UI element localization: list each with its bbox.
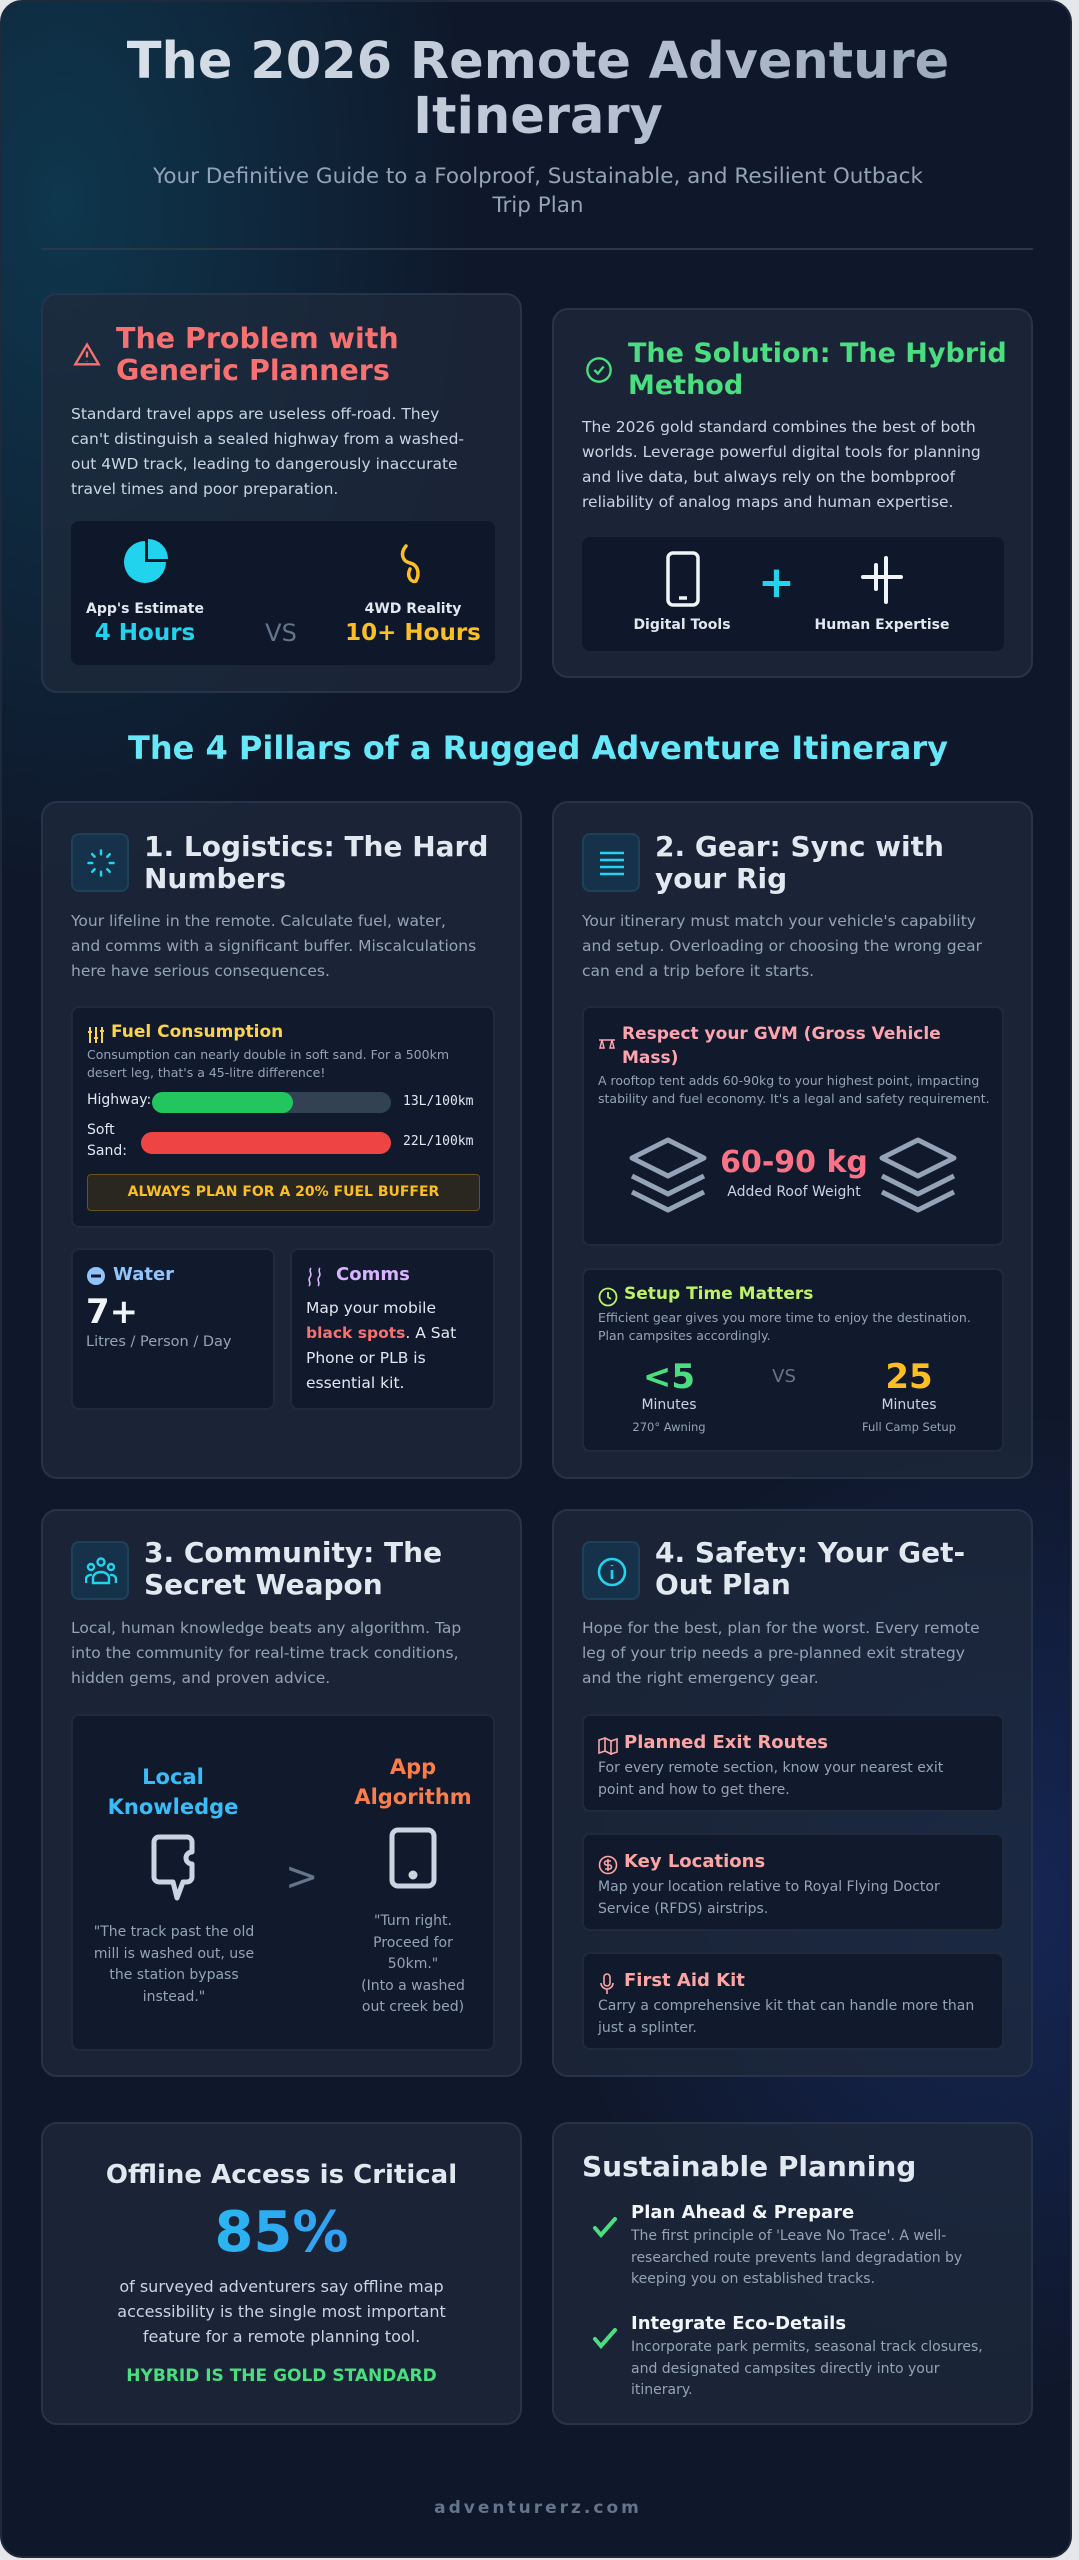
text: solution: worlds. Leverage powerful digital tools for planning [582, 443, 981, 461]
stat: 85% [43, 2200, 520, 2266]
comparison: app vs reality [71, 521, 495, 665]
water box: Litres / Person / Day [86, 1334, 231, 1350]
text: logistics: here have serious consequences. [71, 962, 330, 980]
title [2, 34, 1074, 144]
text: solution: reliability of analog maps and human expertise. [582, 493, 954, 511]
text: safety: leg of your trip needs a pre-planned exit strategy [582, 1644, 965, 1662]
stat: full camp: 25 [885, 1357, 933, 1397]
fuel consumption box: desert leg, that's a 45-litre difference! [87, 1065, 325, 1080]
item: first aid: just a splinter. [598, 2020, 697, 2036]
stat: awning: <5 [643, 1357, 695, 1397]
heading: logistics [144, 830, 488, 895]
text: problem: travel times and poor preparation. [71, 480, 338, 498]
heading: community [144, 1536, 442, 1601]
footer: adventurerz.com [434, 2498, 642, 2518]
text: logistics: Your lifeline in the remote. Calculate fuel, water, [71, 912, 446, 930]
water box: Water [113, 1264, 174, 1285]
subtitle [153, 164, 923, 218]
item: exit routes: For every remote section, know your nearest exit [598, 1760, 943, 1776]
GVM box: Mass) [622, 1048, 678, 1068]
comms box: Comms [336, 1264, 410, 1285]
text: offline: of surveyed adventurers say offline map [119, 2277, 444, 2296]
heading: app algorithm [354, 1755, 472, 1809]
icon: chat [152, 1834, 194, 1900]
item: eco details: itinerary. [631, 2382, 693, 2398]
GVM box: stability and fuel economy. It's a legal and safety requirement. [598, 1091, 990, 1106]
text: gear: can end a trip before it starts. [582, 962, 814, 980]
fuel consumption box: Consumption can nearly double in soft sand. For a 500km [87, 1047, 449, 1062]
heading: problem: The Problem with [116, 322, 399, 355]
item: plan ahead: Plan Ahead & Prepare [631, 2202, 854, 2223]
item: key locations: Map your location relative to Royal Flying Doctor [598, 1879, 940, 1895]
hybrid diagram: Human Expertise [815, 617, 949, 633]
icon: tablet [390, 1828, 436, 1888]
text: problem: can't distinguish a sealed highway from a washed- [71, 430, 464, 448]
icon: layers left [630, 1138, 706, 1212]
bar: soft sand [87, 1122, 127, 1159]
item: eco details: Integrate Eco-Details [631, 2313, 846, 2334]
setup time box [582, 1268, 1004, 1452]
comparison: local vs app: Proceed for [373, 1934, 453, 1950]
setup time box: Plan campsites accordingly. [598, 1328, 771, 1343]
heading: app algorithm: App [390, 1755, 436, 1779]
GVM box: 60-90 kg [720, 1145, 868, 1180]
comparison: local vs app: "The track past the old mill is washed out, use the station bypass instead." [94, 1924, 254, 2004]
comparison: app vs reality: 4WD Reality [365, 601, 461, 617]
comparison: local vs app: (Into a washed [361, 1978, 465, 1994]
comparison: app vs reality: VS [265, 619, 297, 647]
comparison: local vs app [71, 1714, 495, 2051]
setup time box: Efficient gear gives you more time to enjoy the destination. [598, 1310, 971, 1325]
heading: safety: Out Plan [655, 1568, 791, 1601]
item: plan ahead: researched route prevents land degradation by [631, 2250, 962, 2266]
panel: gear [552, 801, 1033, 1479]
text: safety: Hope for the best, plan for the worst. Every remote [582, 1619, 980, 1637]
icon: community [71, 1541, 129, 1600]
text: community: Local, human knowledge beats any algorithm. Tap [71, 1619, 461, 1637]
heading: 4 pillars: The 4 Pillars of a Rugged Adventure Itinerary [128, 729, 948, 767]
comparison: local vs app: 50km." [388, 1956, 438, 1972]
hybrid diagram: Digital Tools [633, 617, 731, 633]
heading: logistics: 1. Logistics: The Hard [144, 830, 488, 863]
heading: problem [116, 322, 399, 387]
title: The 2026 Remote Adventure [127, 32, 949, 91]
text: community: into the community for real-time track conditions, [71, 1644, 459, 1662]
text: community [71, 1619, 461, 1687]
text: gear [582, 912, 982, 980]
text: safety [582, 1619, 980, 1687]
comparison: app vs reality: 10+ Hours [345, 620, 481, 646]
arrow: greater than: > [285, 1854, 319, 1900]
text: logistics [71, 912, 476, 980]
stat: 85%: 85% [214, 2200, 349, 2265]
icon: foot [400, 544, 420, 584]
icon: layers right [880, 1138, 956, 1212]
hybrid diagram [582, 537, 1004, 651]
item: key locations [582, 1833, 1004, 1931]
icon: gear list [582, 833, 640, 892]
text: problem: Standard travel apps are useless off-road. They [71, 405, 439, 423]
heading: app algorithm: Algorithm [354, 1785, 472, 1809]
heading: solution: The Solution: The Hybrid [628, 338, 1007, 369]
panel: problem [41, 293, 522, 693]
callout: fuel buffer: ALWAYS PLAN FOR A 20% FUEL BUFFER [128, 1184, 439, 1200]
icon: warning [73, 342, 101, 366]
heading: sustainable: Sustainable Planning [582, 2150, 916, 2183]
text: offline [117, 2277, 446, 2346]
panel: safety [552, 1509, 1033, 2077]
GVM box: A rooftop tent adds 60-90kg to your highest point, impacting [598, 1073, 979, 1088]
GVM box: Added Roof Weight [727, 1184, 861, 1200]
text: solution: The 2026 gold standard combines the best of both [582, 418, 976, 436]
item: plan ahead: keeping you on established tracks. [631, 2271, 875, 2287]
bar: soft sand: Soft [87, 1122, 115, 1138]
bar: soft sand: Sand: [87, 1143, 127, 1159]
water box [71, 1248, 275, 1410]
item: key locations: Service (RFDS) airstrips. [598, 1901, 768, 1917]
text: offline: feature for a remote planning tool. [143, 2327, 420, 2346]
item: eco details: Incorporate park permits, seasonal track closures, [631, 2339, 983, 2355]
heading: solution: Method [628, 370, 743, 401]
comparison: local vs app: Local [142, 1765, 204, 1789]
item: eco details [592, 2313, 983, 2398]
GVM box: Respect your GVM (Gross Vehicle [622, 1024, 941, 1044]
icon: plus: + [758, 557, 795, 608]
icon: tools [861, 556, 903, 604]
comms box: Map your mobile [306, 1299, 436, 1317]
item: exit routes [582, 1714, 1004, 1812]
icon: clock [598, 1288, 618, 1306]
fuel consumption box: 13L/100km [403, 1094, 473, 1109]
text: problem [71, 405, 464, 498]
callout: fuel buffer [87, 1174, 480, 1211]
panel: offline access [41, 2122, 522, 2425]
text: solution [582, 418, 981, 511]
panel: solution [552, 308, 1033, 678]
icon: scales [599, 1039, 615, 1049]
icon: check circle [586, 357, 612, 383]
item: plan ahead [592, 2202, 962, 2287]
icon: phone [666, 551, 700, 607]
icon: pie [124, 539, 168, 583]
icon: water [87, 1267, 105, 1285]
text: safety: and the right emergency gear. [582, 1669, 819, 1687]
icon: logistics [71, 833, 129, 892]
title: Itinerary [413, 87, 663, 146]
setup time box: VS [772, 1366, 796, 1387]
fuel consumption box: Fuel Consumption [111, 1022, 283, 1042]
comparison: local vs app: "Turn right. [374, 1913, 452, 1929]
item: exit routes: Planned Exit Routes [624, 1732, 828, 1753]
heading: offline: Offline Access is Critical [106, 2160, 457, 2190]
setup time box: Minutes [641, 1397, 697, 1413]
text: solution: and live data, but always rely on the bombproof [582, 468, 955, 486]
comms box: black spots. A Sat [306, 1324, 456, 1342]
text: problem: out 4WD track, leading to dangerously inaccurate [71, 455, 458, 473]
item: plan ahead: The first principle of 'Leave No Trace'. A well- [631, 2228, 946, 2244]
GVM box [582, 1006, 1004, 1246]
heading: safety: 4. Safety: Your Get- [655, 1536, 965, 1569]
comparison: local vs app: out creek bed) [362, 1999, 464, 2015]
item: eco details: and designated campsites directly into your [631, 2360, 939, 2376]
callout: hybrid: HYBRID IS THE GOLD STANDARD [126, 2366, 437, 2386]
heading: logistics: Numbers [144, 862, 286, 895]
panel: sustainable planning [552, 2122, 1033, 2425]
text: logistics: and comms with a significant buffer. Miscalculations [71, 937, 476, 955]
heading: safety [655, 1536, 965, 1601]
heading: gear: 2. Gear: Sync with [655, 830, 944, 863]
icon: sliders [88, 1027, 104, 1043]
comms box: essential kit. [306, 1374, 404, 1392]
heading: community: 3. Community: The [144, 1536, 442, 1569]
text: community: hidden gems, and proven advice. [71, 1669, 330, 1687]
subtitle: Trip Plan [492, 193, 584, 218]
fuel consumption box: 22L/100km [403, 1134, 473, 1149]
comparison: app vs reality: 4 Hours [95, 620, 195, 646]
text: gear: Your itinerary must match your vehicle's capability [582, 912, 976, 930]
heading: gear [655, 830, 944, 895]
panel: community [41, 1509, 522, 2077]
icon: signal [308, 1267, 321, 1287]
setup time box: 270° Awning [632, 1420, 706, 1434]
setup time box: Minutes [881, 1397, 937, 1413]
fuel consumption box [71, 1006, 495, 1228]
heading: gear: your Rig [655, 862, 787, 895]
heading: community: Secret Weapon [144, 1568, 383, 1601]
item: first aid: Carry a comprehensive kit that can handle more than [598, 1998, 974, 2014]
comms box: Phone or PLB is [306, 1349, 426, 1367]
water box: 7+ [86, 1292, 138, 1332]
item: first aid [582, 1952, 1004, 2050]
subtitle: Your Definitive Guide to a Foolproof, Sustainable, and Resilient Outback [153, 164, 923, 189]
comparison: app vs reality: App's Estimate [86, 601, 204, 617]
heading: problem: Generic Planners [116, 354, 390, 387]
bar: highway: Highway: [87, 1092, 151, 1108]
text: gear: and setup. Overloading or choosing the wrong gear [582, 937, 982, 955]
comms box [290, 1248, 495, 1410]
setup time box: Full Camp Setup [862, 1420, 956, 1434]
comparison: local vs app: Knowledge [108, 1795, 238, 1819]
panel: logistics [41, 801, 522, 1479]
heading: solution [628, 338, 1007, 401]
icon: info [582, 1541, 640, 1600]
item: exit routes: point and how to get there. [598, 1782, 790, 1798]
item: first aid: First Aid Kit [624, 1970, 745, 1991]
item: key locations: Key Locations [624, 1851, 765, 1872]
text: offline: accessibility is the single most important [117, 2302, 446, 2321]
setup time box: Setup Time Matters [624, 1284, 813, 1304]
